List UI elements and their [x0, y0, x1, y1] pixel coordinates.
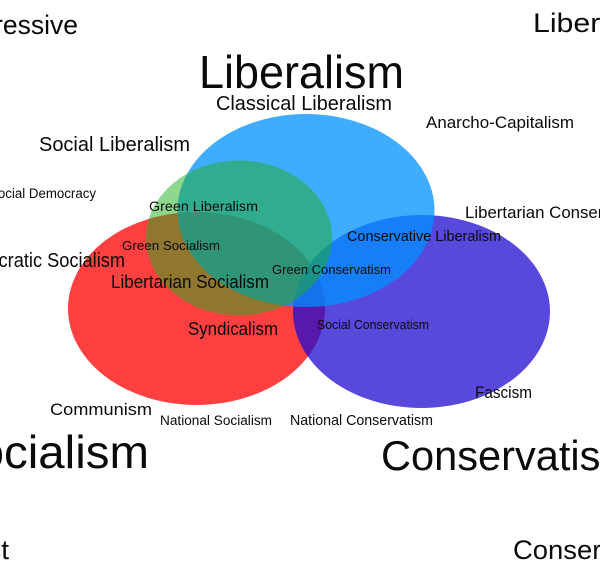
label: Communism: Communism: [50, 400, 152, 419]
label: Anarcho-Capitalism: Anarcho-Capitalism: [426, 113, 574, 132]
label: Classical Liberalism: Classical Liberalism: [216, 93, 392, 115]
label: Social Conservatism: Social Conservatism: [317, 317, 429, 332]
label: Social Liberalism: Social Liberalism: [39, 134, 190, 156]
label: Conservative Liberalism: Conservative Liberalism: [347, 229, 501, 245]
label: Green Liberalism: Green Liberalism: [149, 198, 258, 214]
label: Fascism: Fascism: [475, 384, 532, 402]
label: National Socialism: National Socialism: [160, 413, 272, 428]
label: Libertarian Socialism: Libertarian Socialism: [111, 271, 269, 292]
ellipse: green politics (green): [146, 160, 332, 316]
heading: Liberalism: Liberalism: [199, 46, 404, 98]
ellipse: liberalism (blue): [178, 114, 434, 307]
ellipse: conservatism (purple): [293, 215, 550, 408]
label: Syndicalism: Syndicalism: [188, 319, 278, 339]
ellipse: socialism (red): [68, 212, 325, 405]
label: National Conservatism: National Conservatism: [290, 413, 433, 429]
label: Green Socialism: Green Socialism: [122, 238, 220, 253]
label: Green Conservatism: Green Conservatism: [272, 262, 391, 277]
